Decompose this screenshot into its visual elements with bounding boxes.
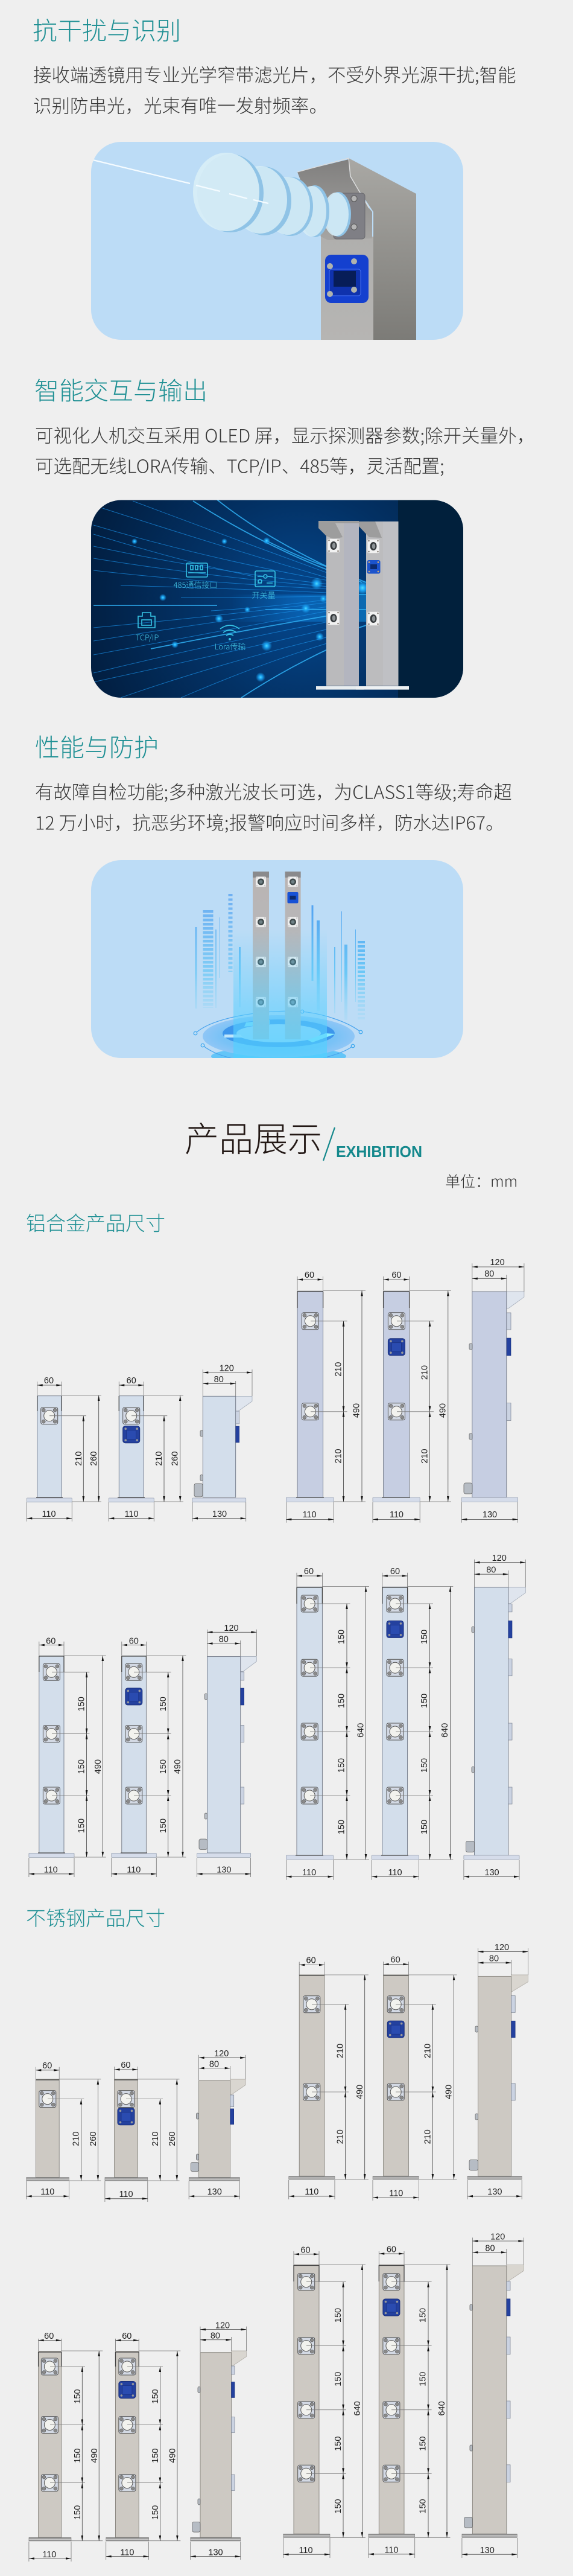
data stream lines — [93, 500, 370, 698]
drawing: steel 640 front view: 640 — [353, 2401, 362, 2416]
drawing: steel three-sensor side view: 80 — [211, 2331, 220, 2341]
drawing: 260 front view with module: 260 — [171, 1452, 180, 1466]
drawing: steel three-sensor front view: 150 — [73, 2448, 83, 2463]
drawing: 640 front view: 640 — [356, 1723, 366, 1738]
drawing: steel 490 front view: 210 — [336, 2129, 346, 2144]
drawing: 260 front view with module — [109, 1376, 183, 1522]
drawing: steel 260 front view with module: 110 — [119, 2190, 133, 2199]
drawing: 490 front view with module: 60 — [391, 1270, 401, 1280]
drawing: 640 side view — [464, 1554, 525, 1880]
drawing: 490 front view without module: 110 — [302, 1510, 317, 1520]
drawing group: steel 490 three sensors — [29, 2321, 246, 2562]
drawing: 260 side view: 80 — [214, 1375, 224, 1385]
drawing group: aluminium 490 three sensors — [29, 1624, 256, 1877]
drawing: 640 front view: 60 — [304, 1567, 314, 1577]
drawing: steel three-sensor front view — [29, 2332, 103, 2562]
light column glow — [233, 929, 327, 1058]
drawing: 640 front view with module: 60 — [390, 1567, 400, 1577]
drawing: steel three-sensor front view: 150 — [73, 2389, 83, 2404]
icon: 485 interface — [174, 563, 217, 590]
section heading: exhibition — [185, 1112, 422, 1161]
drawing: steel 490 front view with module: 490 — [445, 2085, 454, 2099]
drawing: steel 260 front view with module — [105, 2061, 180, 2202]
drawing: steel three-sensor front view: 110 — [42, 2550, 56, 2560]
drawing: 640 front view with module: 150 — [420, 1820, 429, 1834]
drawing: 640 front view — [286, 1567, 369, 1880]
drawing: steel 260 front view — [27, 2061, 101, 2199]
image panel: columns over glowing ring — [91, 860, 463, 1065]
drawing: steel 490 front view with module: 110 — [389, 2189, 403, 2198]
section: anti-interference — [33, 11, 516, 340]
hood recess — [297, 159, 372, 240]
drawing: 490 side view: 80 — [484, 1269, 494, 1279]
drawing: steel 490 front view: 110 — [305, 2187, 318, 2197]
drawing: steel 640 front view: 150 — [334, 2371, 343, 2386]
drawing: 260 front view without module: 210 — [74, 1452, 84, 1466]
drawing: 490 front view with module: 210 — [420, 1365, 430, 1380]
drawing: 490 front view without module — [286, 1270, 366, 1523]
section: smart interaction — [34, 371, 535, 698]
drawing: three-sensor front view with module: 60 — [129, 1637, 139, 1647]
body text: smart interaction: 可视化人机交互采用 OLED 屏，显示探测器参数;除开关量外， — [35, 421, 535, 448]
drawing: steel 260 side view: 80 — [209, 2059, 219, 2069]
drawing: steel 640 front view with module: 640 — [437, 2401, 447, 2416]
drawing: steel 490 front view with module: 210 — [423, 2129, 433, 2144]
icon: Lora wifi: Lora传输 — [215, 640, 245, 652]
drawing: 640 front view with module: 150 — [420, 1630, 429, 1644]
drawing: steel 260 front view with module: 210 — [151, 2131, 160, 2146]
drawing: steel three-sensor side view: 130 — [208, 2548, 223, 2558]
drawing: three-sensor front view with module: 150 — [159, 1697, 168, 1711]
drawing: 640 front view: 150 — [337, 1820, 346, 1834]
drawing: steel 640 side view: 130 — [480, 2546, 495, 2555]
drawing: 640 front view: 110 — [302, 1868, 316, 1878]
drawing: 640 front view: 150 — [337, 1694, 346, 1708]
drawing: steel 260 front view with module: 60 — [121, 2061, 130, 2070]
column pair — [253, 872, 301, 1039]
glowing ring base — [193, 1009, 363, 1058]
drawing: three-sensor front view: 150 — [77, 1697, 87, 1711]
drawing: 640 front view: 150 — [337, 1758, 346, 1773]
icon: TCP/IP — [136, 613, 159, 643]
drawing: steel three-sensor front view with module: 490 — [168, 2448, 178, 2463]
drawing: steel three-sensor front view: 150 — [73, 2505, 83, 2520]
drawing: steel three-sensor front view with module: 150 — [151, 2505, 160, 2520]
drawing: 640 front view with module: 150 — [420, 1758, 429, 1773]
drawing: 260 front view without module — [27, 1376, 101, 1522]
drawing: 260 front view without module: 110 — [42, 1510, 56, 1519]
drawing: steel 640 front view with module: 150 — [419, 2437, 428, 2451]
body text: smart interaction — [35, 421, 535, 478]
hood rim — [297, 158, 369, 208]
drawing: 640 side view: 120 — [492, 1554, 507, 1563]
column front face — [321, 237, 373, 340]
drawing: 490 front view without module: 210 — [334, 1449, 344, 1464]
drawing: three-sensor front view: 150 — [77, 1819, 87, 1833]
drawing: 490 side view: 120 — [490, 1258, 505, 1267]
drawing: 490 front view with module: 210 — [420, 1449, 430, 1464]
drawing group: steel 260 — [27, 2049, 245, 2202]
drawing: 260 side view: 130 — [212, 1510, 227, 1519]
drawing: three-sensor front view: 150 — [77, 1759, 87, 1774]
icon: blue display module — [325, 255, 369, 303]
drawing: steel 640 front view with module: 150 — [419, 2371, 428, 2386]
drawing: three-sensor side view: 130 — [217, 1865, 232, 1875]
body text: smart interaction: 可选配无线LORA传输、TCP/IP、485等，灵活配置; — [35, 451, 445, 478]
drawing: three-sensor front view: 110 — [44, 1865, 58, 1875]
drawing group: aluminium 260 — [27, 1364, 252, 1522]
image panel: lens and column — [91, 142, 463, 340]
drawing: steel 260 front view: 260 — [89, 2131, 98, 2146]
column pair — [316, 521, 409, 690]
drawing: 490 front view without module: 210 — [334, 1362, 344, 1377]
drawing: 490 front view with module: 110 — [390, 1510, 404, 1520]
drawing: steel three-sensor front view: 60 — [44, 2332, 54, 2341]
drawing: 640 front view with module: 150 — [420, 1694, 429, 1708]
drawing: steel 640 front view — [283, 2245, 366, 2558]
section heading: exhibition: 产品展示 — [185, 1112, 322, 1161]
heading: smart interaction: 智能交互与输出 — [34, 371, 207, 407]
drawing: steel 490 side view — [467, 1943, 528, 2199]
drawing: 260 front view with module: 210 — [154, 1452, 164, 1466]
drawing: steel 640 front view: 110 — [299, 2546, 313, 2555]
unit note: 单位：mm — [445, 1170, 518, 1191]
drawing: 640 front view with module: 110 — [388, 1868, 402, 1878]
drawing: 490 front view without module: 490 — [352, 1403, 361, 1418]
subheading: aluminium dimensions: 铝合金产品尺寸 — [26, 1207, 165, 1236]
drawing: steel 640 side view: 120 — [490, 2232, 505, 2242]
drawing: steel 640 front view: 60 — [300, 2245, 311, 2255]
drawing: steel 640 front view with module: 110 — [384, 2546, 398, 2555]
drawing group: steel 640 four sensors — [283, 2232, 524, 2558]
drawing: steel three-sensor front view: 490 — [90, 2448, 100, 2463]
drawing: 490 front view with module — [373, 1270, 451, 1523]
drawing: steel 260 side view: 120 — [214, 2049, 229, 2059]
drawing: steel 260 side view: 130 — [207, 2187, 222, 2197]
drawing: three-sensor front view with module: 490 — [173, 1759, 183, 1774]
drawing group: aluminium 640 four sensors — [286, 1554, 525, 1880]
drawing: steel 490 side view: 80 — [489, 1954, 499, 1964]
subheading: stainless steel dimensions: 不锈钢产品尺寸 — [26, 1902, 165, 1931]
icon: switch — [252, 571, 276, 601]
drawing: three-sensor side view: 120 — [224, 1624, 239, 1633]
drawing: steel 260 front view: 210 — [72, 2131, 81, 2146]
drawing: 490 side view: 130 — [483, 1510, 497, 1520]
drawing: three-sensor front view with module: 110 — [127, 1865, 141, 1875]
mounting plate — [334, 193, 365, 239]
drawing group: aluminium 490 two sensors — [286, 1258, 524, 1523]
icon: 485 interface: 485通信接口 — [174, 579, 217, 590]
drawing: steel 490 front view with module: 210 — [423, 2044, 433, 2058]
drawing: 260 front view without module: 260 — [89, 1452, 99, 1466]
drawing: three-sensor front view: 60 — [46, 1637, 55, 1647]
chart-like light bars — [195, 894, 361, 1020]
drawing: steel 260 front view with module: 260 — [168, 2131, 177, 2146]
drawing: three-sensor front view — [29, 1637, 106, 1877]
section: performance and protection — [35, 727, 512, 1065]
drawing: steel 640 front view with module: 150 — [419, 2308, 428, 2323]
drawing: three-sensor side view — [197, 1624, 256, 1877]
section heading: exhibition: EXHIBITION — [336, 1143, 422, 1161]
drawing: 490 front view with module: 490 — [438, 1403, 448, 1418]
drawing: 260 front view with module: 110 — [124, 1510, 139, 1519]
body text: performance: 有故障自检功能;多种激光波长可选，为CLASS1等级;寿命超 — [35, 777, 512, 804]
drawing: steel 640 front view with module: 150 — [419, 2499, 428, 2514]
drawing: 490 front view without module: 60 — [305, 1270, 314, 1280]
body text: performance — [35, 777, 512, 835]
drawing: 260 front view without module: 60 — [44, 1376, 54, 1386]
drawing: steel three-sensor side view: 120 — [215, 2321, 230, 2331]
drawing: steel 490 front view: 210 — [336, 2044, 346, 2058]
drawing: 640 side view: 80 — [486, 1566, 496, 1575]
body text: anti-interference: 接收端透镜用专业光学窄带滤光片，不受外界光源干扰;智能 — [33, 60, 516, 87]
icon: Lora wifi — [215, 625, 245, 652]
drawing: steel three-sensor front view with module — [106, 2332, 180, 2560]
drawing: 260 front view with module: 60 — [127, 1376, 136, 1386]
drawing: 260 side view: 120 — [220, 1364, 234, 1374]
drawing: steel 490 side view: 130 — [487, 2187, 502, 2197]
drawing: three-sensor front view with module: 150 — [159, 1819, 168, 1833]
drawing: steel three-sensor front view with module: 60 — [122, 2332, 131, 2341]
drawing: steel 640 front view with module — [369, 2245, 450, 2558]
drawing: steel 260 front view: 110 — [40, 2187, 54, 2197]
lens stack — [193, 153, 351, 237]
icon: switch: 开关量 — [252, 589, 276, 601]
drawing: three-sensor front view with module — [112, 1637, 186, 1877]
drawing: 640 front view with module: 640 — [440, 1723, 450, 1738]
ring arcs and nodes — [197, 1010, 285, 1032]
drawing: steel 640 front view: 150 — [334, 2308, 343, 2323]
drawing: steel 490 front view with module — [373, 1956, 457, 2201]
drawing: steel 640 front view: 150 — [334, 2437, 343, 2451]
icon: TCP/IP: TCP/IP — [136, 631, 159, 643]
drawing: steel 640 side view: 80 — [485, 2244, 495, 2254]
drawing: steel 640 side view — [462, 2232, 524, 2558]
drawing: steel 490 front view: 60 — [306, 1956, 316, 1965]
body text: anti-interference — [33, 60, 516, 118]
heading: performance and protection: 性能与防护 — [35, 727, 159, 764]
column side face — [349, 158, 416, 340]
drawing: 640 front view with module — [372, 1567, 453, 1880]
drawing: steel 490 side view: 120 — [495, 1943, 509, 1953]
drawing: steel three-sensor front view with module: 110 — [120, 2548, 134, 2558]
drawing: steel 490 front view — [289, 1956, 369, 2199]
drawing: 640 side view: 130 — [484, 1868, 499, 1878]
drawing: 640 front view: 150 — [337, 1630, 346, 1644]
drawing: steel 260 side view — [189, 2049, 245, 2199]
heading: anti-interference: 抗干扰与识别 — [33, 11, 181, 47]
drawing: steel 260 front view: 60 — [42, 2061, 52, 2071]
drawing: steel three-sensor side view — [191, 2321, 246, 2560]
drawing: three-sensor side view: 80 — [219, 1634, 229, 1644]
drawing: steel 490 front view with module: 60 — [391, 1956, 400, 1965]
drawing: steel 640 front view: 150 — [334, 2499, 343, 2514]
drawing: 490 side view — [461, 1258, 524, 1523]
drawing: steel three-sensor front view with module: 150 — [151, 2389, 160, 2404]
icon: laser beam — [93, 160, 268, 203]
drawing: steel 640 front view with module: 60 — [387, 2245, 396, 2255]
drawing: three-sensor front view: 490 — [93, 1759, 103, 1774]
image panel: data streams and columns — [91, 500, 463, 698]
drawing: 260 side view — [192, 1364, 252, 1522]
body text: performance: 12 万小时，抗恶劣环境;报警响应时间多样，防水达IP67。 — [35, 809, 504, 835]
drawing: steel 490 front view: 490 — [355, 2085, 365, 2099]
drawing: steel three-sensor front view with module: 150 — [151, 2448, 160, 2463]
drawing: three-sensor front view with module: 150 — [159, 1759, 168, 1774]
drawing group: steel 490 two sensors — [289, 1943, 528, 2201]
body text: anti-interference: 识别防串光，光束有唯一发射频率。 — [33, 92, 328, 118]
